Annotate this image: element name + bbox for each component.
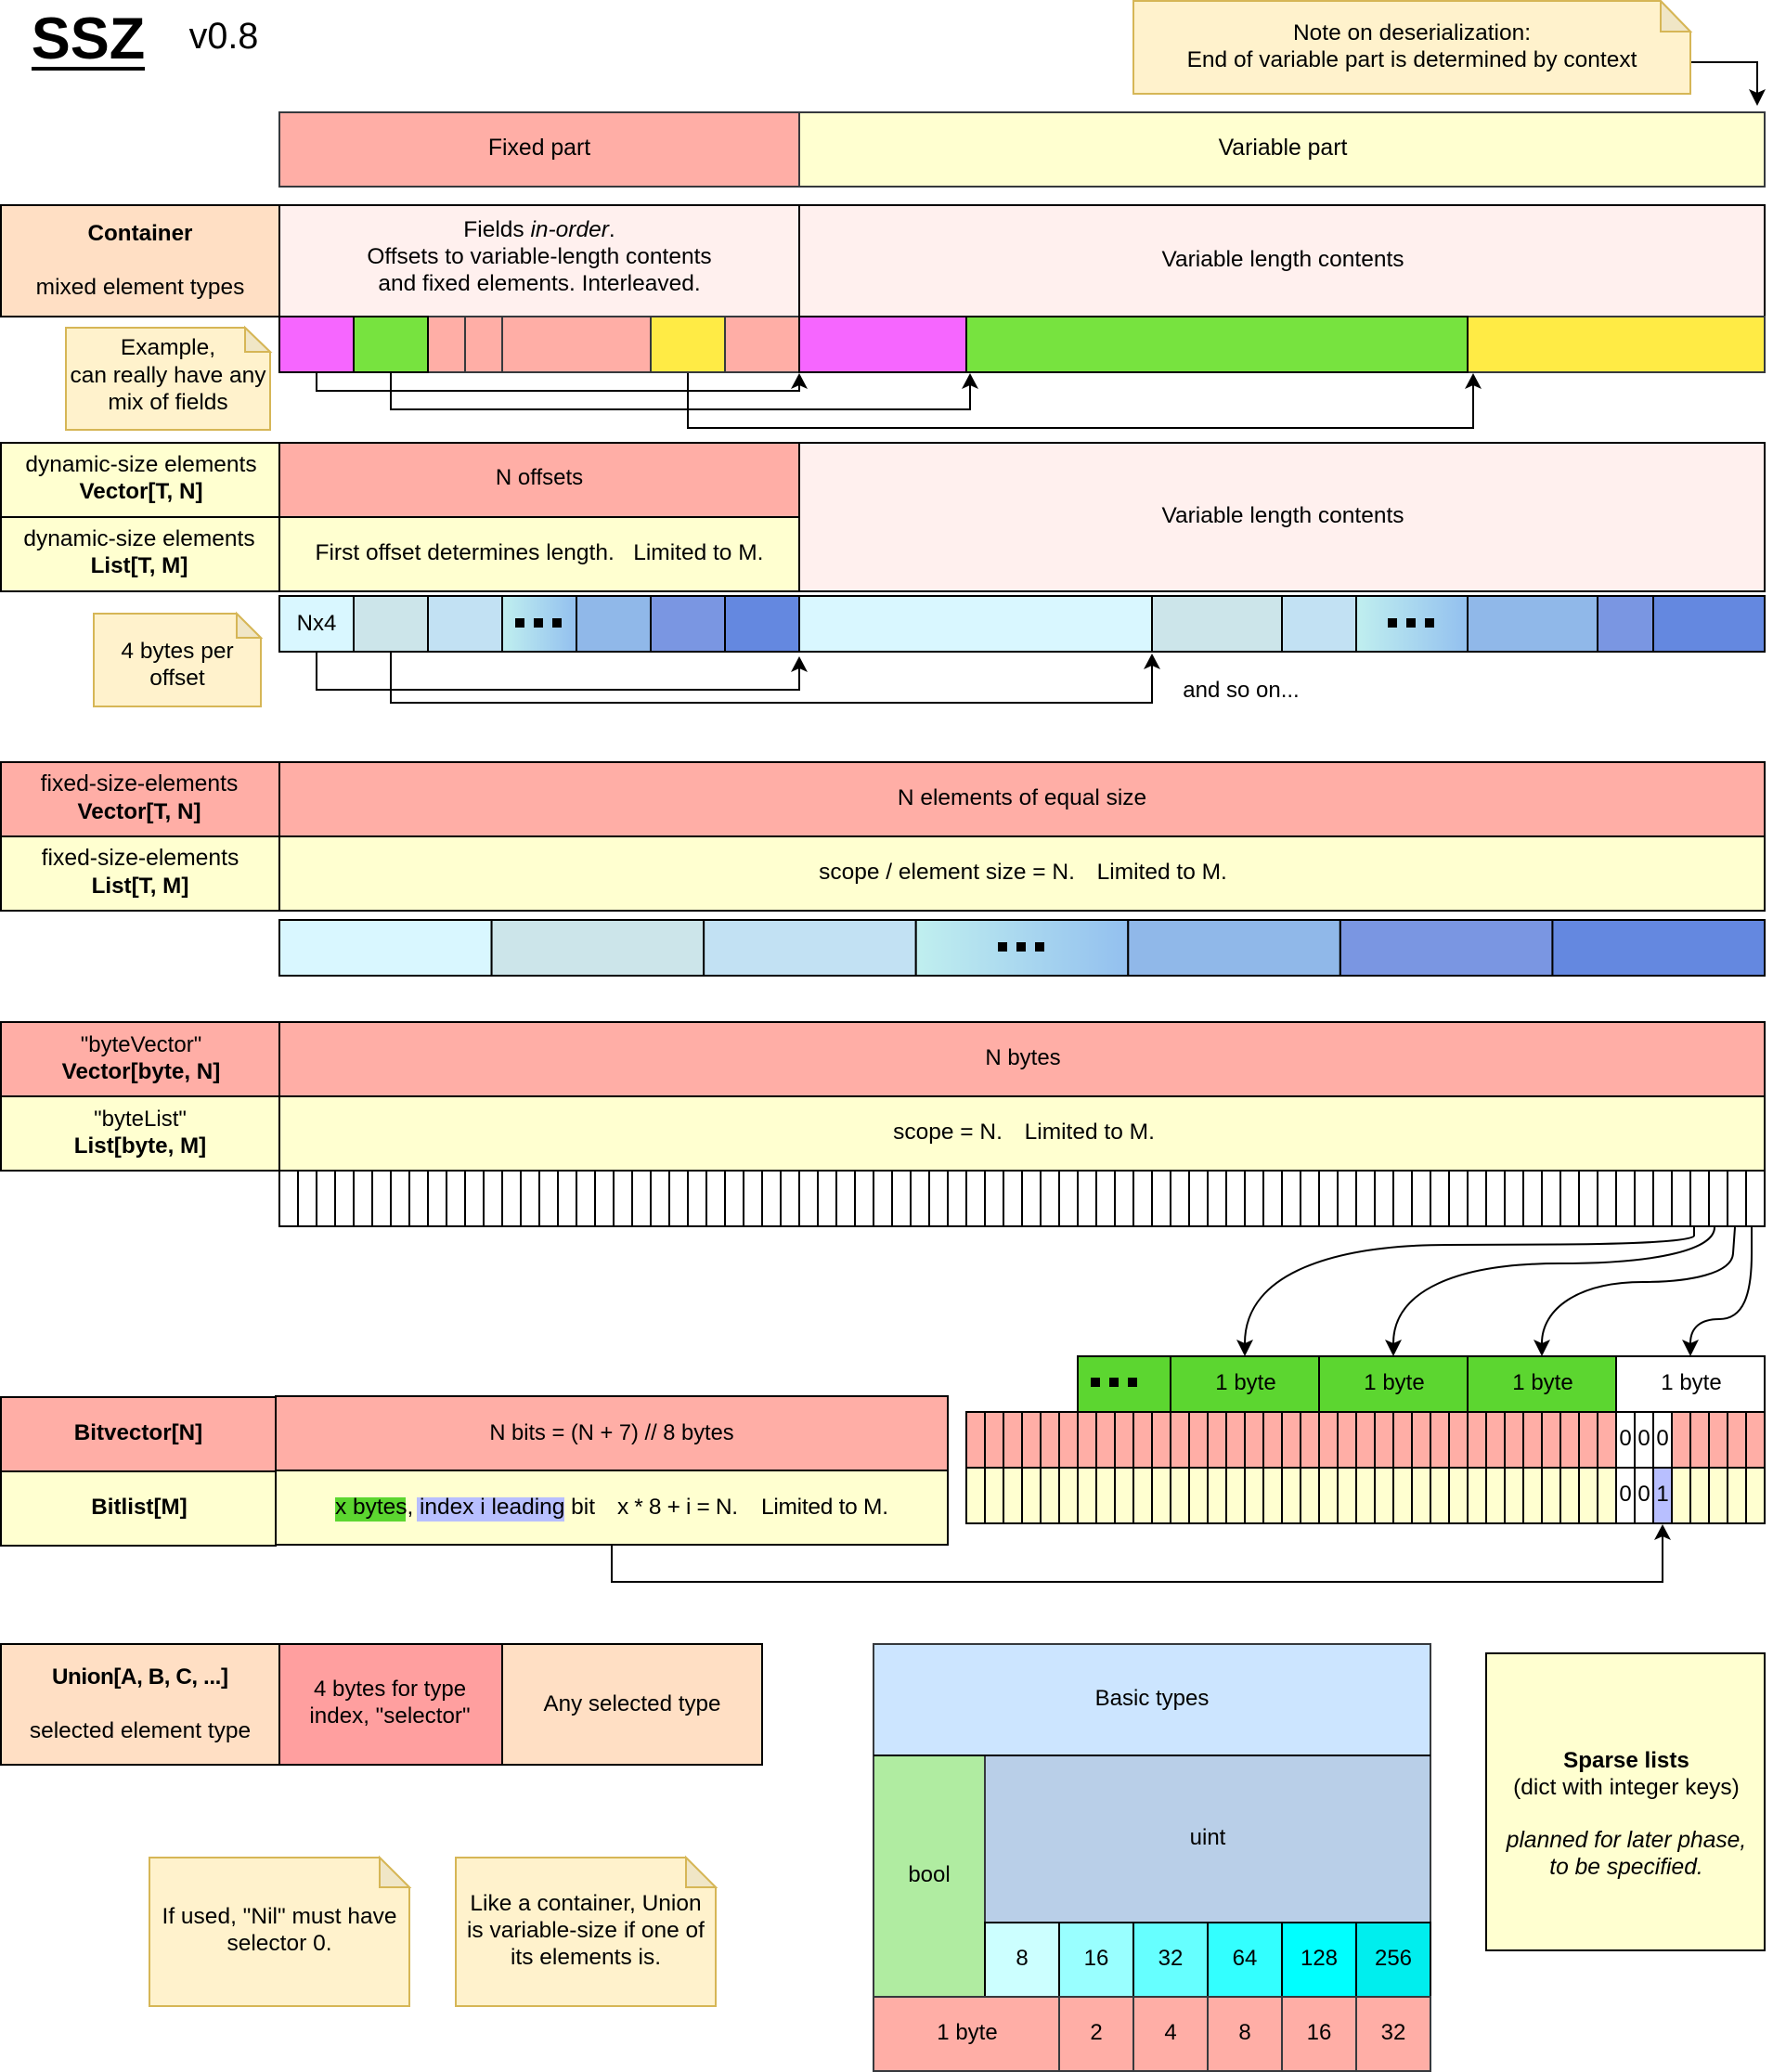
panel: basic types: 1 byte — [937, 2020, 998, 2045]
bit cell rows: 0 — [1656, 1426, 1669, 1451]
title: SSZ v0.8 — [32, 6, 258, 71]
note: union variable-size: is variable-size if one of — [467, 1918, 705, 1943]
panel: dynamic-size vector and list: dynamic-size elements — [23, 526, 255, 551]
panel: dynamic-size vector and list: Variable length contents — [1161, 503, 1404, 528]
arrow: bitlist to leading bit — [612, 1524, 1671, 1582]
panel: basic types: 8 — [1238, 2020, 1251, 2045]
byte cells bar — [278, 1171, 1766, 1226]
arrows: offset pointers — [317, 653, 1160, 703]
note: nil selector: selector 0. — [226, 1931, 332, 1956]
panel: byte vector and byte list: "byteList" — [94, 1107, 187, 1132]
arrows: curved byte mapping — [1236, 1227, 1752, 1356]
panel: fixed-size vector and list: N elements of equal size — [898, 785, 1146, 810]
panel: fixed-size vector and list: fixed-size-elements — [42, 846, 239, 871]
note: nil selector: If used, "Nil" must have — [162, 1904, 396, 1929]
panel: container: Fields in-order. — [463, 217, 615, 242]
panel: dynamic-size vector and list: List[T, M] — [91, 553, 188, 578]
panel: container: Variable length contents — [1161, 247, 1404, 272]
bit cell rows: 0 — [1619, 1482, 1632, 1507]
panel: sparse lists: (dict with integer keys) — [1513, 1775, 1740, 1800]
panel: byte vector and byte list: Vector[byte, N] — [62, 1059, 220, 1084]
panel: dynamic-size vector and list: Vector[T, N] — [79, 479, 203, 504]
panel: basic types: 256 — [1375, 1946, 1412, 1971]
byte blocks: 1 byte — [1215, 1370, 1276, 1395]
container example field bar — [279, 317, 1765, 372]
panel: bitvector and bitlist: N bits = (N + 7) // 8 bytes — [489, 1421, 734, 1445]
note: 4 bytes per offset — [94, 614, 261, 706]
panel: fixed-size vector and list: List[T, M] — [92, 874, 188, 899]
panel: byte vector and byte list: scope = N. Limited to M. — [893, 1120, 1155, 1145]
note: union variable-size: Like a container, Union — [470, 1891, 702, 1916]
panel: union: index, "selector" — [309, 1703, 471, 1729]
note: example mix of fields: can really have any — [70, 363, 266, 388]
header: fixed and variable parts: Fixed part — [488, 136, 590, 161]
panel: byte vector and byte list: N bytes — [985, 1045, 1061, 1070]
note: union variable-size — [456, 1858, 716, 2006]
panel: basic types: uint — [1190, 1825, 1226, 1850]
fixed-size element bar — [279, 920, 1765, 976]
panel: basic types: Basic types — [1095, 1686, 1209, 1711]
bit cell rows: 1 — [1656, 1482, 1669, 1507]
panel: basic types: 64 — [1233, 1946, 1257, 1971]
panel: bitvector and bitlist — [1, 1396, 948, 1546]
note: 4 bytes per offset: 4 bytes per — [121, 639, 234, 664]
panel: basic types: 4 — [1164, 2020, 1177, 2045]
panel: basic types: 8 — [1016, 1946, 1029, 1971]
panel: byte vector and byte list: List[byte, M] — [74, 1133, 206, 1159]
panel: fixed-size vector and list: scope / element size = N. Limited to M. — [819, 860, 1227, 885]
offset bar labels and dots: Nx4 — [297, 611, 336, 636]
panel: union: 4 bytes for type — [314, 1677, 466, 1702]
note: deserialization — [1133, 1, 1690, 94]
note: 4 bytes per offset: offset — [149, 666, 205, 691]
panel: union: selected element type — [30, 1718, 251, 1743]
byte blocks: 1 byte — [1512, 1370, 1573, 1395]
panel: dynamic-size vector and list: dynamic-size elements — [25, 452, 257, 477]
panel: fixed-size vector and list: fixed-size-elements — [41, 771, 238, 796]
panel: union — [1, 1644, 762, 1765]
panel: bitvector and bitlist: Limited to M. — [761, 1495, 888, 1520]
panel: union: Union[A, B, C, ...] — [52, 1664, 228, 1690]
bit cell rows: 0 — [1619, 1426, 1632, 1451]
byte blocks: 1 byte — [1661, 1370, 1722, 1395]
header: fixed and variable parts — [279, 112, 1765, 187]
panel: container: Offsets to variable-length contents — [367, 244, 712, 269]
title: SSZ v0.8: v0.8 — [189, 16, 258, 57]
byte blocks — [1078, 1356, 1765, 1412]
offset bar labels and dots — [297, 611, 1434, 636]
panel: sparse lists — [1486, 1653, 1765, 1950]
panel: dynamic-size vector and list: N offsets — [496, 465, 583, 490]
title: SSZ v0.8: SSZ — [32, 6, 145, 71]
panel: container: and fixed elements. Interleaved. — [378, 271, 701, 296]
offsets element bar — [279, 596, 1765, 652]
byte blocks: 1 byte — [1364, 1370, 1425, 1395]
panel: basic types: 16 — [1084, 1946, 1108, 1971]
panel: byte vector and byte list — [1, 1022, 1765, 1171]
panel: basic types: 32 — [1158, 1946, 1183, 1971]
note: example mix of fields: Example, — [121, 335, 215, 360]
panel: basic types: 32 — [1381, 2020, 1405, 2045]
note: union variable-size: its elements is. — [511, 1945, 661, 1970]
panel: sparse lists: to be specified. — [1549, 1855, 1703, 1880]
panel: union: Any selected type — [544, 1691, 720, 1716]
panel: dynamic-size vector and list: First offset determines length. Limited to M. — [316, 540, 763, 565]
panel: byte vector and byte list: "byteVector" — [81, 1032, 201, 1057]
bit cell rows — [965, 1412, 1766, 1523]
panel: fixed-size vector and list — [1, 762, 1765, 911]
panel: basic types: 16 — [1307, 2020, 1331, 2045]
note: example mix of fields — [66, 328, 270, 430]
arrow: note to variable part end — [1691, 62, 1766, 106]
panel: bitvector and bitlist: x bytes, index i leading bit — [335, 1495, 595, 1520]
note: deserialization: Note on deserialization: — [1293, 20, 1531, 45]
panel: sparse lists: planned for later phase, — [1506, 1828, 1746, 1853]
panel: container: Container — [88, 221, 193, 246]
panel: basic types: bool — [908, 1862, 951, 1887]
header: fixed and variable parts: Variable part — [1219, 136, 1347, 161]
panel: fixed-size vector and list: Vector[T, N] — [77, 799, 201, 824]
arrows: offsets to variable contents — [317, 373, 1482, 428]
note: deserialization: End of variable part is determined by context — [1187, 47, 1637, 72]
panel: bitvector and bitlist: Bitvector[N] — [74, 1420, 202, 1445]
panel: container — [1, 205, 1765, 317]
panel: basic types — [874, 1644, 1430, 2071]
bit cell rows: 0 — [1637, 1426, 1650, 1451]
text: and so on: and so on... — [1183, 678, 1300, 703]
note: example mix of fields: mix of fields — [108, 390, 228, 415]
panel: container: mixed element types — [36, 275, 244, 300]
bit cell rows: 0 — [1637, 1482, 1650, 1507]
panel: bitvector and bitlist: Bitlist[M] — [91, 1495, 188, 1520]
panel: bitvector and bitlist: x * 8 + i = N. — [617, 1495, 738, 1520]
note: nil selector — [149, 1858, 409, 2006]
panel: basic types: 128 — [1301, 1946, 1338, 1971]
panel: dynamic-size vector and list — [1, 443, 1765, 591]
panel: basic types: 2 — [1090, 2020, 1103, 2045]
panel: sparse lists: Sparse lists — [1563, 1748, 1689, 1773]
